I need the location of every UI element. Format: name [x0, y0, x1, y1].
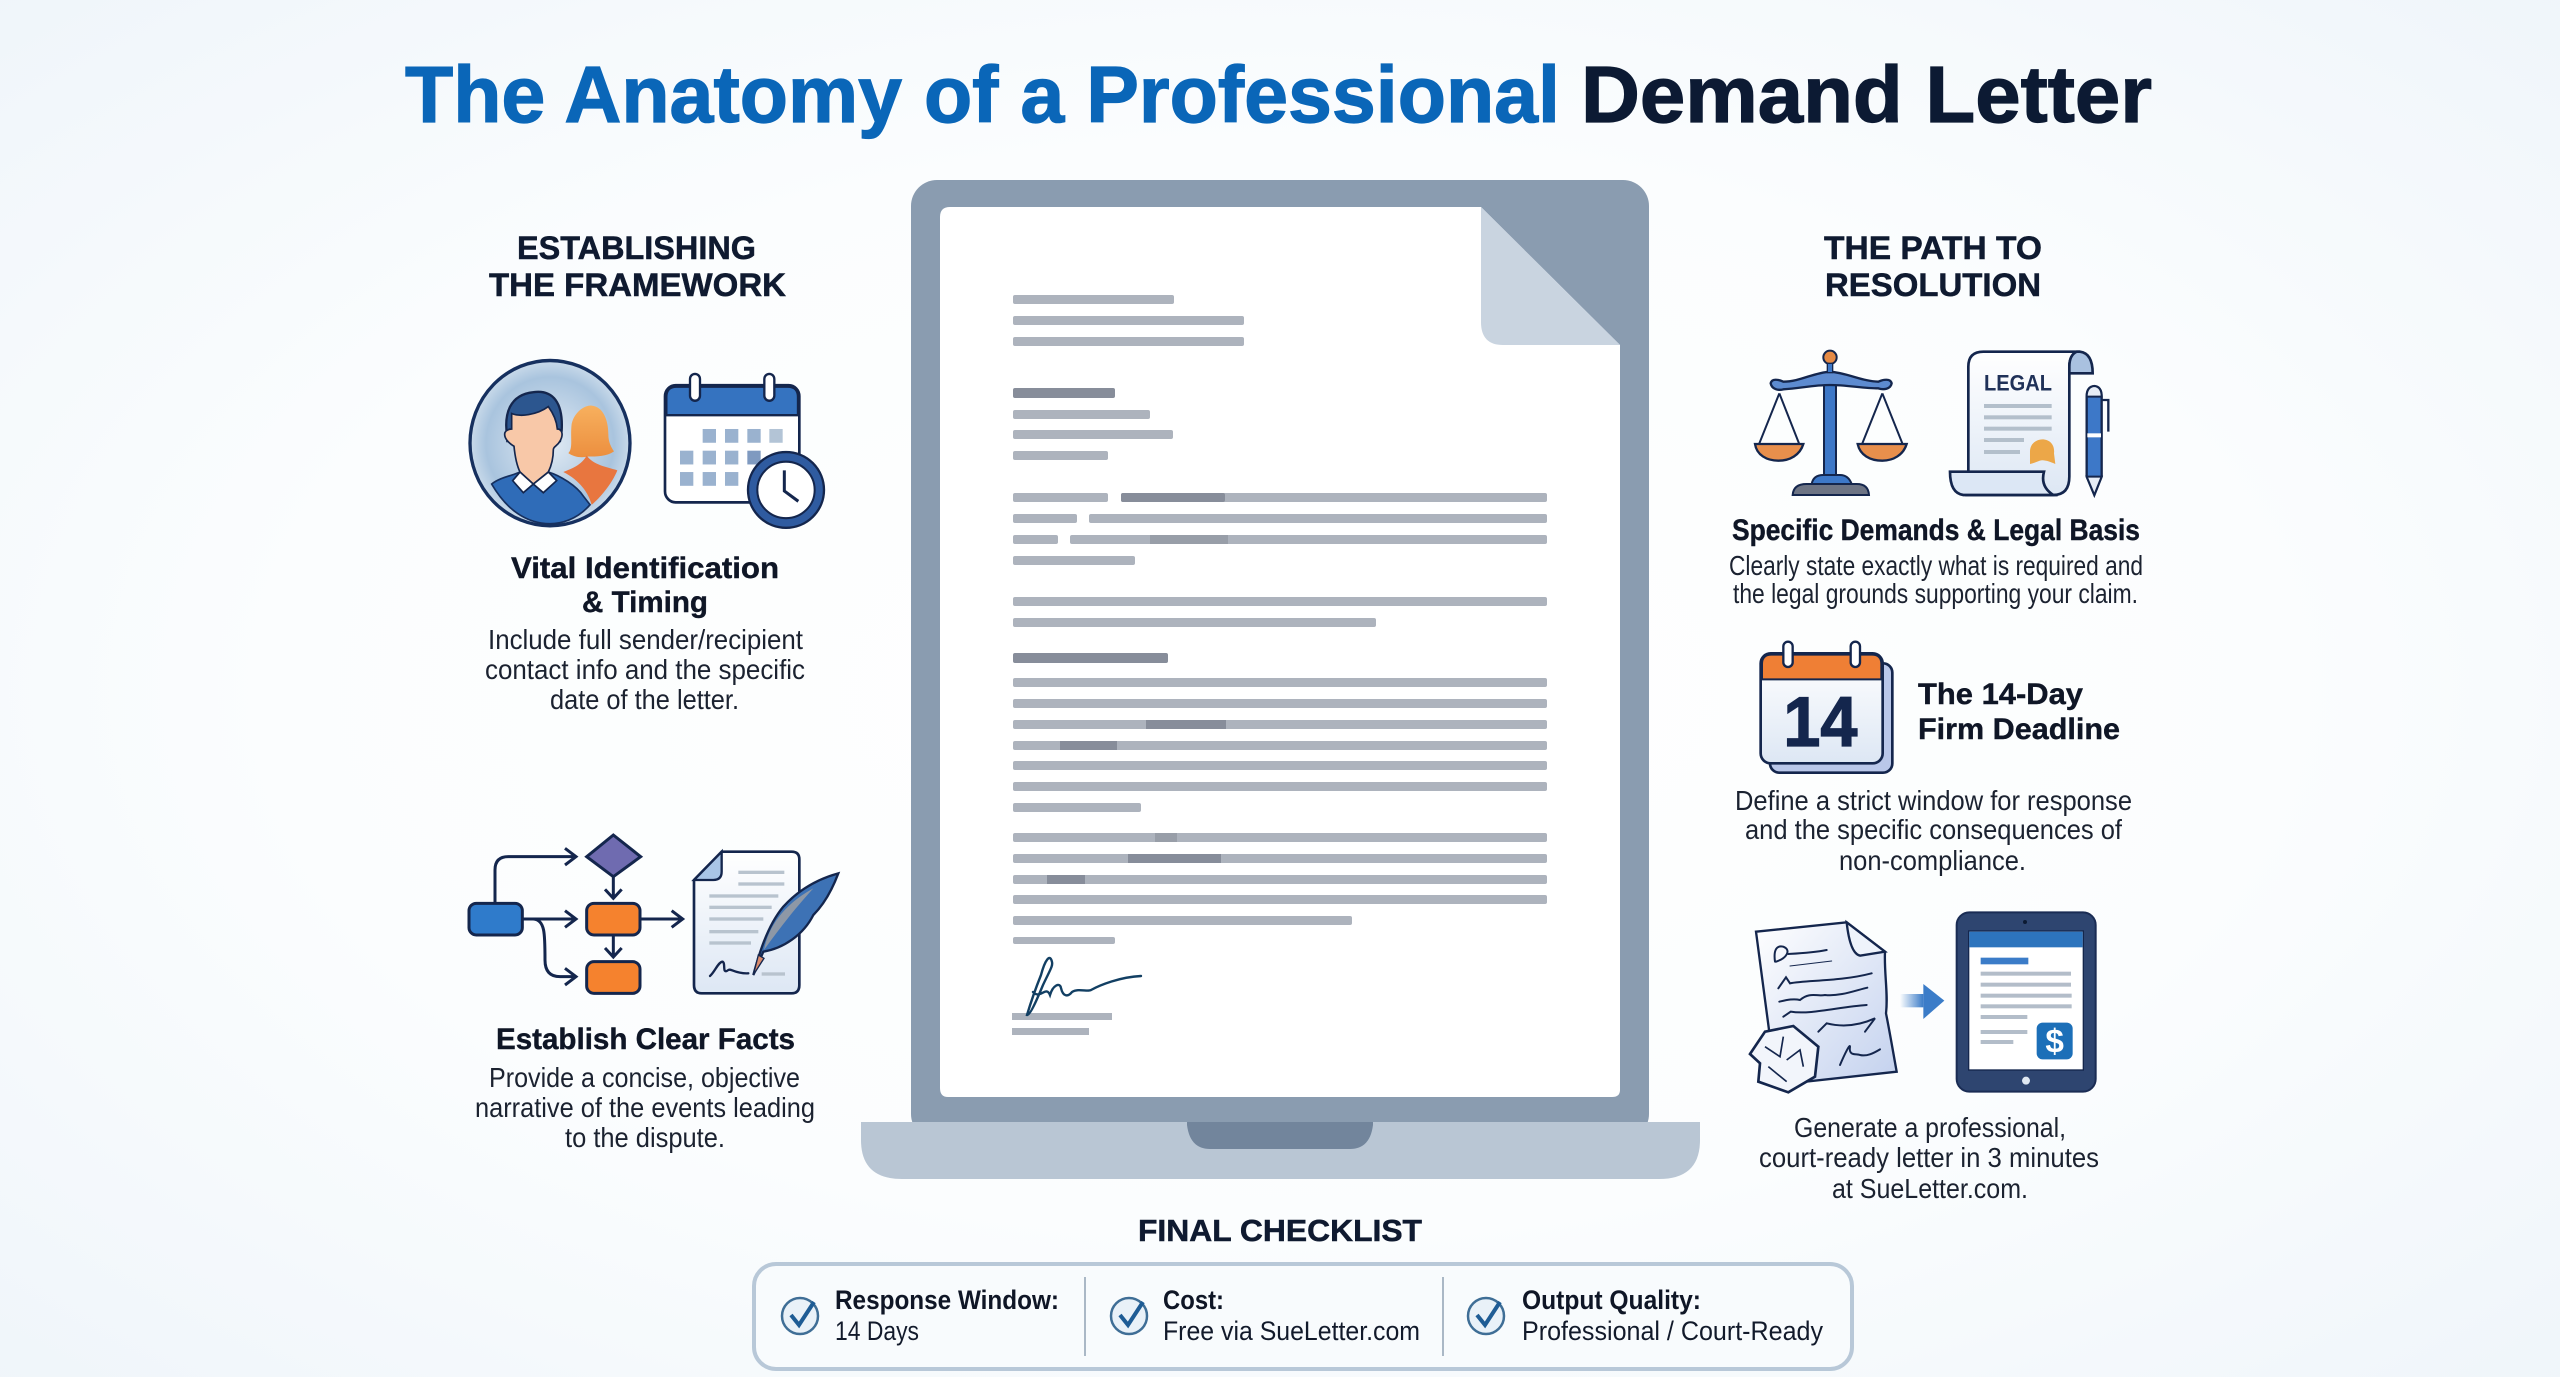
block: 14-day deadline text: and the specific consequences of: [1745, 814, 2122, 845]
block: 14-day deadline heading: [1918, 678, 2120, 746]
icon: tablet with letter: [1957, 912, 2096, 1092]
block: generate letter text: at SueLetter.com.: [1832, 1173, 2028, 1204]
laptop base: [861, 1122, 1700, 1179]
block: establish clear facts text: Provide a concise, objective: [489, 1062, 800, 1093]
right column heading: THE PATH TO: [1824, 230, 2042, 266]
block: specific demands text: Clearly state exactly what is required and: [1729, 550, 2143, 581]
icon: tablet with letter: $: [2045, 1024, 2064, 1061]
left column heading: ESTABLISHING: [517, 230, 756, 266]
laptop with letter: [861, 180, 1700, 1179]
item: cost: Free via SueLetter.com: [1163, 1316, 1420, 1346]
block: specific demands text: Specific Demands & Legal Basis: [1732, 514, 2140, 547]
title: The Anatomy of a Professional: [405, 50, 1560, 139]
block: vital identification text: contact info and the specific: [485, 654, 805, 685]
icon: people in circle: [470, 360, 630, 526]
panel: final checklist: [754, 1264, 1852, 1369]
item: response window: [782, 1285, 1059, 1346]
block: vital identification text: [485, 552, 805, 715]
item: response window: Response Window:: [835, 1285, 1059, 1315]
page fold: [1481, 207, 1620, 345]
laptop lid: [911, 180, 1649, 1140]
item: output quality: Professional / Court-Ready: [1522, 1316, 1823, 1346]
letter page: [940, 207, 1620, 1097]
block: establish clear facts text: [475, 1023, 815, 1153]
left column heading: THE FRAMEWORK: [489, 267, 786, 303]
block: generate letter text: [1759, 1112, 2099, 1204]
arrow: letter to tablet: [1900, 984, 1944, 1019]
icon: scales of justice: [1755, 351, 1907, 495]
icon: legal scroll and pen: [1950, 352, 2108, 495]
letter text lines: [1012, 295, 1547, 1035]
icon: legal scroll and pen: LEGAL: [1984, 371, 2052, 396]
heading: final checklist: FINAL CHECKLIST: [1138, 1213, 1422, 1248]
block: generate letter text: Generate a professional,: [1794, 1112, 2066, 1143]
block: specific demands text: the legal grounds supporting your claim.: [1733, 578, 2138, 609]
icon: flowchart: [469, 835, 683, 993]
block: vital identification text: & Timing: [582, 586, 708, 619]
icon: 14-day calendar: [1761, 642, 1892, 773]
icon: crumpled handwritten letter: [1750, 922, 1897, 1092]
item: output quality: Output Quality:: [1522, 1285, 1701, 1315]
block: vital identification text: Vital Identification: [511, 552, 779, 585]
block: vital identification text: date of the letter.: [550, 684, 739, 715]
block: 14-day deadline heading: The 14-Day: [1918, 678, 2083, 711]
item: response window: 14 Days: [835, 1316, 919, 1346]
block: 14-day deadline text: [1735, 785, 2132, 876]
right column heading: [1824, 230, 2042, 303]
right column heading: RESOLUTION: [1825, 267, 2041, 303]
item: output quality: [1468, 1285, 1823, 1346]
block: establish clear facts text: to the dispute.: [565, 1122, 725, 1153]
block: 14-day deadline heading: Firm Deadline: [1918, 713, 2120, 746]
block: generate letter text: court-ready letter in 3 minutes: [1759, 1142, 2099, 1173]
block: specific demands text: [1729, 514, 2143, 609]
icon: document with quill: [694, 852, 838, 993]
item: cost: Cost:: [1163, 1285, 1224, 1315]
left column heading: [489, 230, 786, 303]
laptop notch: [1187, 1122, 1373, 1149]
block: establish clear facts text: narrative of the events leading: [475, 1092, 815, 1123]
title: Demand Letter: [1581, 50, 2152, 139]
icon: 14-day calendar: 14: [1783, 682, 1857, 761]
title: [405, 50, 2152, 139]
block: 14-day deadline text: Define a strict window for response: [1735, 785, 2132, 816]
icon: calendar with clock: [665, 374, 824, 528]
item: cost: [1111, 1285, 1420, 1346]
block: vital identification text: Include full sender/recipient: [488, 624, 803, 655]
signature: [1027, 958, 1141, 1015]
block: establish clear facts text: Establish Clear Facts: [496, 1023, 795, 1056]
block: 14-day deadline text: non-compliance.: [1839, 845, 2026, 876]
